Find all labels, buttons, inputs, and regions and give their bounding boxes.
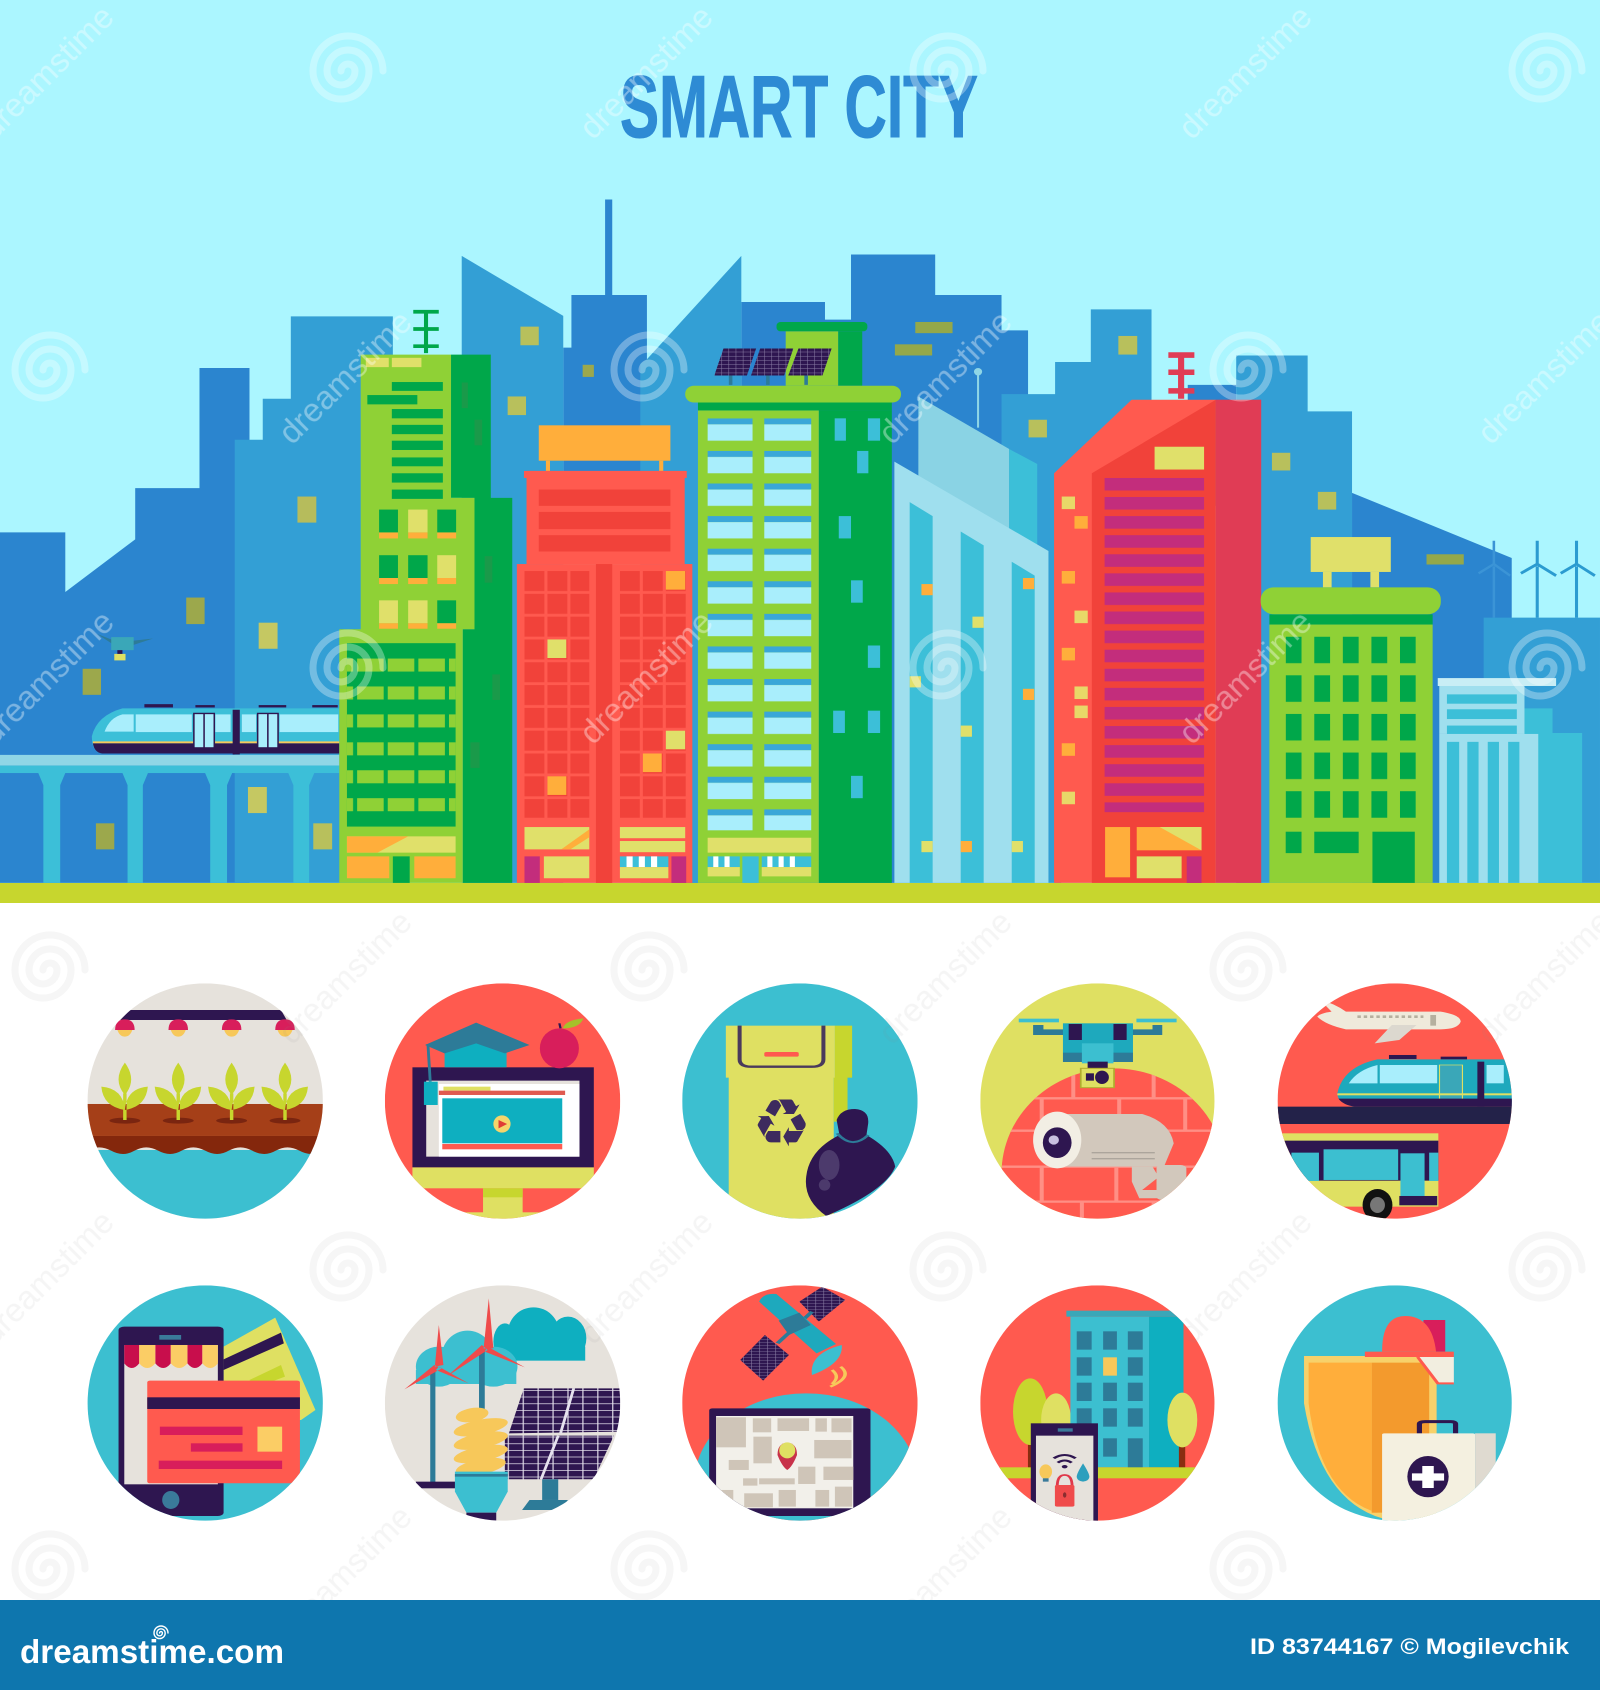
icon: drone and security camera <box>980 983 1214 1219</box>
wind turbines far right <box>1479 541 1595 618</box>
sky background <box>0 0 1600 905</box>
title: SMART CITY <box>620 57 978 156</box>
watermark: spirals and dreamstime text: dreamstime <box>572 1203 720 1351</box>
watermark: spirals and dreamstime text: dreamstime <box>871 1498 1019 1646</box>
building: red tower with orange billboard <box>517 425 692 883</box>
building: green block with yellow billboard <box>1261 537 1441 883</box>
icon: waste recycling <box>682 983 918 1222</box>
small drone <box>97 634 153 660</box>
solar panels <box>714 349 832 385</box>
white lower section <box>0 902 1600 1600</box>
icon: vertical farming <box>88 983 323 1220</box>
building: pale-blue glass tower <box>894 396 1048 883</box>
icon: renewable energy <box>385 1285 620 1522</box>
watermark: spirals and dreamstime text: dreamstime <box>271 303 419 451</box>
icon: transport <box>1278 983 1515 1221</box>
footer credit: ID 83744167 © Mogilevchik <box>1250 1634 1570 1659</box>
watermark: spirals and dreamstime text: dreamstime <box>572 0 720 146</box>
icon: mobile payment <box>88 1285 323 1522</box>
building: red angled tower <box>1054 352 1261 883</box>
icon: online education <box>385 983 620 1220</box>
skyline lit windows <box>83 322 1464 849</box>
building: green tower with solar roof <box>685 322 901 883</box>
watermark: spirals and dreamstime text: dreamstime <box>871 303 1019 451</box>
footer logo: dreamstime.com <box>20 1633 284 1670</box>
watermark: spirals and dreamstime text: dreamstime <box>271 1498 419 1646</box>
building: green tower with antenna <box>339 310 512 883</box>
watermark: spirals and dreamstime text: dreamstime <box>572 603 720 751</box>
elevated rail bridge <box>0 755 339 883</box>
footer bar <box>0 1600 1600 1690</box>
watermark: spirals and dreamstime text: dreamstime <box>271 903 419 1051</box>
skyline: far dark-blue silhouette <box>0 200 1512 883</box>
watermark: spirals and dreamstime text: dreamstime <box>1171 1203 1319 1351</box>
icon: safety and first aid <box>1278 1285 1512 1523</box>
city skyline scene <box>0 200 1600 883</box>
building: small pale tower <box>1438 678 1582 883</box>
street lamp <box>974 368 982 428</box>
ground strip <box>0 883 1600 903</box>
icon: smart home <box>980 1285 1214 1524</box>
icon: satellite navigation <box>682 1285 918 1521</box>
icon: waste recycling: ♻ <box>752 1085 811 1162</box>
watermark: spirals and dreamstime text: dreamstime <box>871 903 1019 1051</box>
skyline: mid-blue silhouette <box>235 256 1600 883</box>
watermark: spirals and dreamstime text: dreamstime <box>1171 0 1319 146</box>
watermark: spirals and dreamstime text: dreamstime <box>1171 603 1319 751</box>
train <box>92 704 339 754</box>
